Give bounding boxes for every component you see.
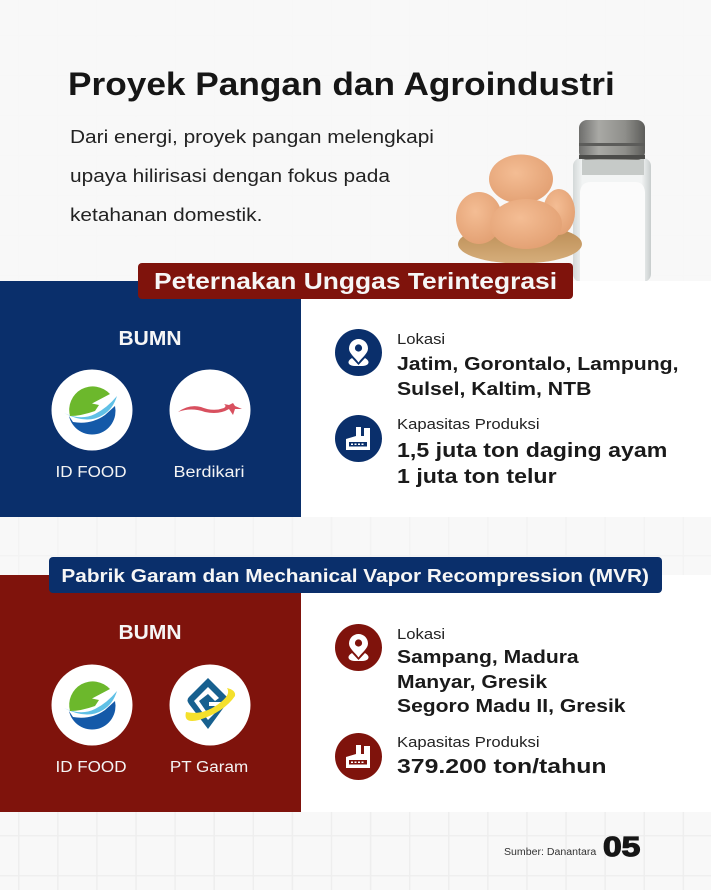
logo: PT Garam	[170, 664, 250, 746]
label: BUMN: BUMN	[118, 328, 182, 350]
intro text: ketahanan domestik.	[70, 204, 262, 225]
label: capacity: Kapasitas Produksi	[397, 416, 540, 433]
logo: ID FOOD	[52, 664, 132, 746]
value: locations: Sulsel, Kaltim, NTB	[397, 378, 591, 398]
heading: salt	[49, 557, 662, 593]
panel: salt red	[0, 575, 301, 812]
panel: poultry blue	[0, 281, 301, 517]
value: capacity: 1 juta ton telur	[397, 465, 557, 488]
panel: salt white	[301, 575, 711, 812]
value: locations: Jatim, Gorontalo, Lampung,	[397, 353, 679, 374]
value: locations: Manyar, Gresik	[397, 670, 547, 692]
icon: factory	[335, 733, 382, 780]
heading: salt: Pabrik Garam dan Mechanical Vapor Recompression (MVR)	[62, 565, 649, 586]
value: capacity	[397, 439, 667, 488]
value: locations	[397, 646, 626, 716]
value: capacity: 379.200 ton/tahun	[397, 755, 607, 778]
value: locations: Sampang, Madura	[397, 646, 579, 667]
page number: 05	[603, 831, 640, 862]
label: ID FOOD: ID FOOD	[55, 759, 127, 776]
label: BUMN: BUMN	[118, 622, 182, 644]
value: locations	[397, 353, 679, 398]
icon: location	[335, 329, 382, 376]
heading: poultry	[138, 263, 573, 299]
logo: ID FOOD	[52, 370, 132, 450]
source: Sumber: Danantara	[504, 847, 596, 858]
heading: poultry: Peternakan Unggas Terintegrasi	[154, 268, 557, 294]
title: Proyek Pangan dan Agroindustri	[68, 66, 615, 102]
label: Lokasi: Lokasi	[397, 626, 445, 643]
label: Lokasi: Lokasi	[397, 331, 445, 348]
label: capacity: Kapasitas Produksi	[397, 734, 540, 751]
intro text	[70, 126, 434, 225]
panel: poultry white	[301, 281, 711, 517]
value: capacity: 1,5 juta ton daging ayam	[397, 439, 667, 462]
label: PT Garam: PT Garam	[170, 759, 248, 776]
label: ID FOOD: ID FOOD	[55, 464, 127, 481]
icon: location	[335, 624, 382, 671]
intro text: Dari energi, proyek pangan melengkapi	[70, 126, 434, 147]
illustration: eggs and salt shaker	[456, 120, 651, 281]
intro text: upaya hilirisasi dengan fokus pada	[70, 165, 390, 186]
label: Berdikari: Berdikari	[174, 464, 244, 481]
value: locations: Segoro Madu II, Gresik	[397, 695, 626, 716]
logo: Berdikari	[170, 370, 250, 450]
icon: factory	[335, 415, 382, 462]
